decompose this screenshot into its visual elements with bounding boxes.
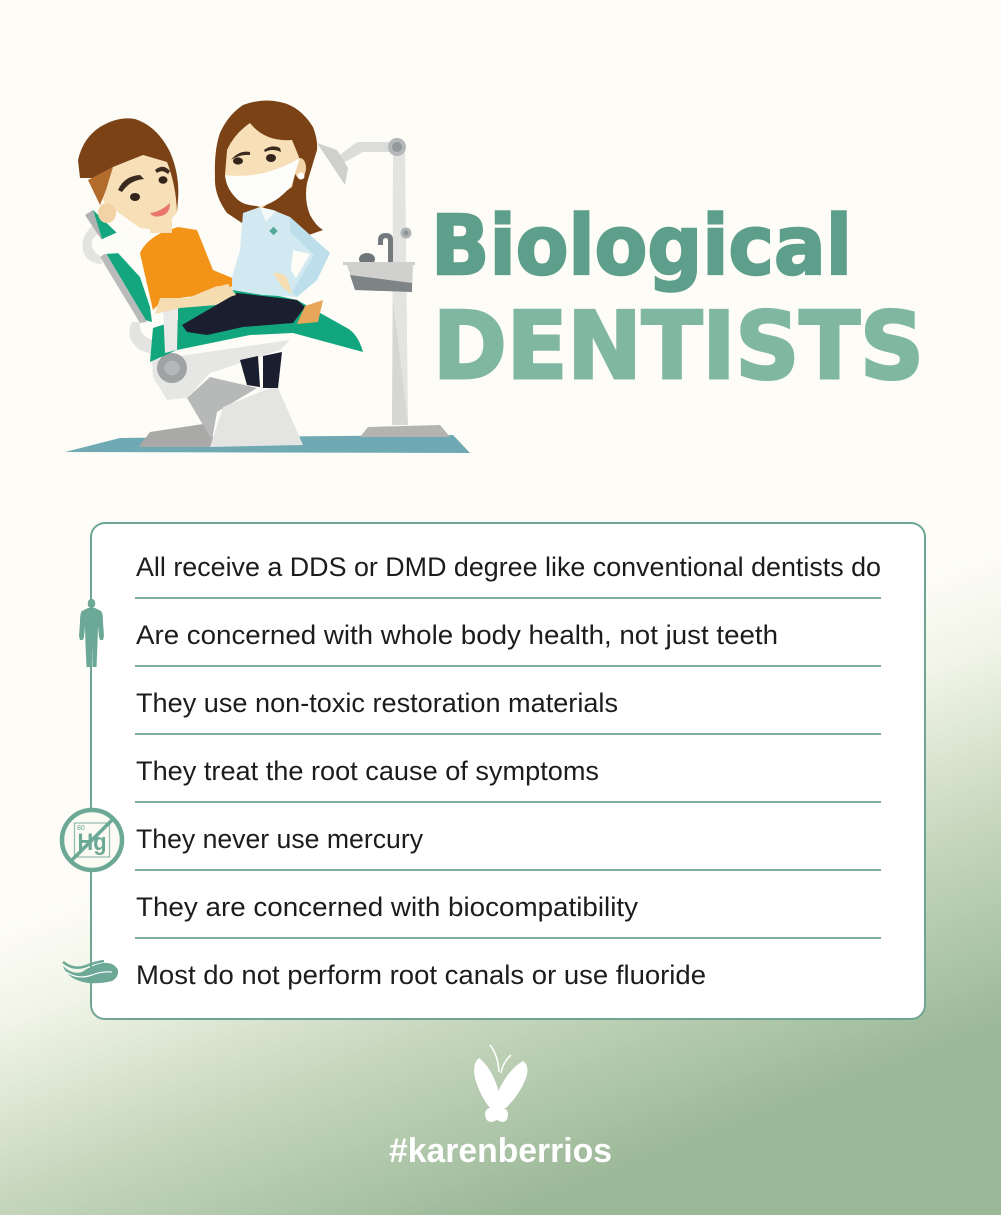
panel: list of characteristics xyxy=(91,523,925,1019)
item 5: They never use mercury xyxy=(136,824,423,854)
item 2: Are concerned with whole body health, not just teeth xyxy=(136,620,778,650)
logo: bunny xyxy=(474,1045,527,1122)
floor mat xyxy=(65,435,470,453)
dentist uniform xyxy=(232,207,330,297)
hashtag: #karenberrios xyxy=(389,1132,612,1170)
icon: no mercury: Hg xyxy=(78,829,106,856)
chair seat xyxy=(150,287,363,362)
dentist hair xyxy=(215,101,323,240)
item 4: They treat the root cause of symptoms xyxy=(136,756,599,786)
dentist face and mask xyxy=(225,123,306,208)
item 3: They use non-toxic restoration materials xyxy=(136,688,618,718)
illustration: dentist and patient xyxy=(65,101,470,453)
patient head xyxy=(78,118,178,233)
chair headrest and back xyxy=(82,210,153,354)
item 7: Most do not perform root canals or use fluoride xyxy=(136,960,706,990)
sink xyxy=(343,233,415,292)
patient legs xyxy=(182,293,323,388)
chair pillar xyxy=(163,307,178,353)
title line: Biological: Biological xyxy=(431,199,852,294)
chair base xyxy=(140,340,303,447)
patient hand xyxy=(212,284,236,300)
item 1: All receive a DDS or DMD degree like conventional dentists do xyxy=(136,552,881,582)
icon: no mercury xyxy=(62,810,122,870)
patient torso xyxy=(140,227,237,314)
icon: no mercury: 80 xyxy=(77,825,85,832)
title line: DENTISTS: DENTISTS xyxy=(433,292,924,400)
icon: toothpaste swoosh xyxy=(63,961,118,983)
dental unit pole and lamp arm xyxy=(317,138,450,437)
title xyxy=(431,199,924,400)
item 6: They are concerned with biocompatibility xyxy=(136,892,639,922)
icon: human body xyxy=(79,599,104,667)
